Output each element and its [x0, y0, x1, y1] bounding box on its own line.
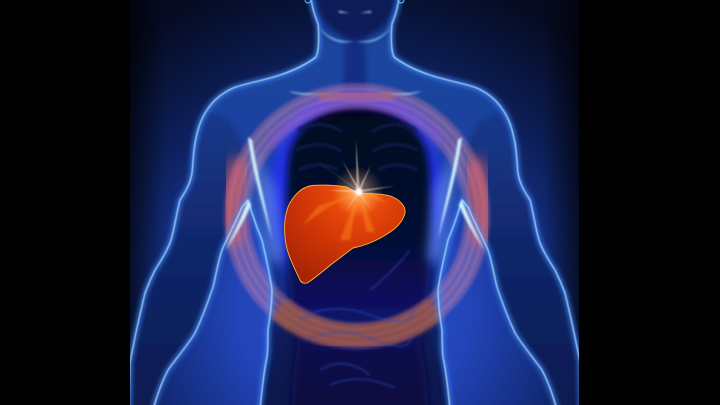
lower torso shade: [272, 325, 438, 394]
chest cavity: [268, 92, 444, 405]
starburst: [320, 142, 394, 214]
light streaks: [226, 11, 484, 250]
liver highlights: [302, 192, 388, 240]
arms: [136, 112, 246, 366]
head and neck shading: [314, 0, 396, 92]
violet inner ring glow: [272, 100, 442, 145]
illustration: male torso with highlighted liver: [130, 0, 579, 405]
ribs and organs: [296, 124, 418, 388]
body silhouette: [130, 0, 580, 405]
body edge glow: [129, 0, 581, 405]
background: [129, 0, 581, 405]
ring: [230, 89, 484, 343]
side torso glow: [250, 145, 460, 262]
liver: [285, 185, 405, 283]
ear studs: [305, 0, 311, 3]
